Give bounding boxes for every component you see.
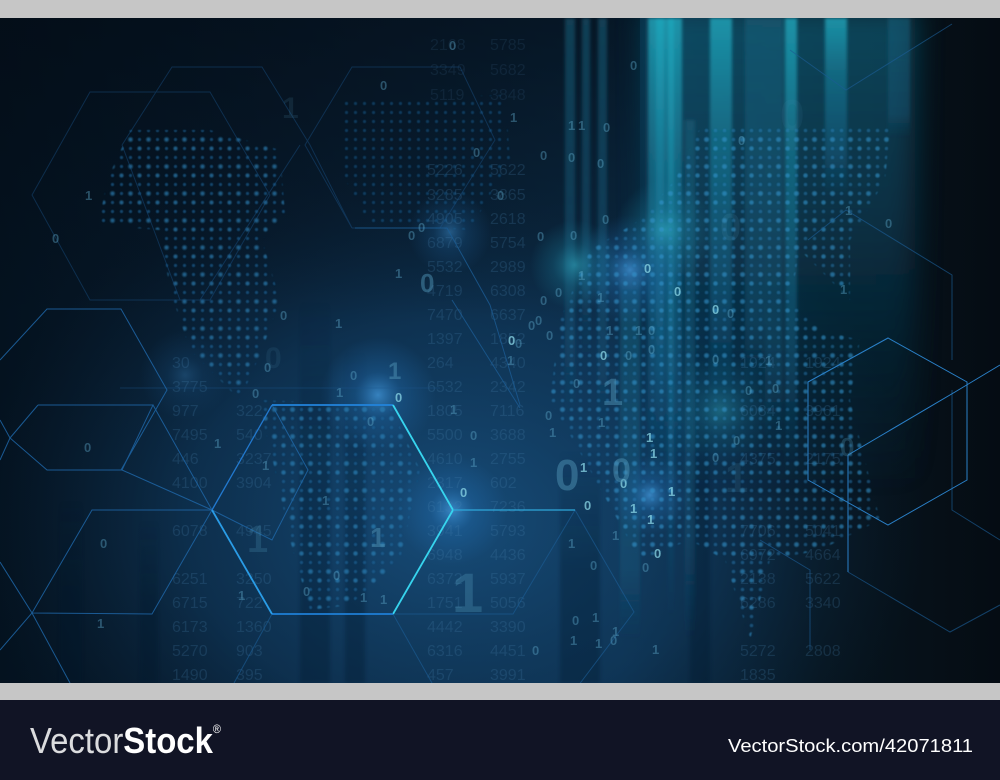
number columns: 5119 <box>430 87 465 104</box>
large binary digits: 1 <box>602 372 623 414</box>
glows <box>140 180 775 565</box>
binary digits: 0 <box>625 348 632 363</box>
binary digits: 1 <box>97 616 104 631</box>
large binary digits: 1 <box>388 358 401 385</box>
number columns: 4664 <box>805 547 841 564</box>
number columns: 457 <box>427 667 454 684</box>
binary digits: 0 <box>537 229 544 244</box>
number columns: 7470 <box>427 307 463 324</box>
number columns: 3340 <box>805 595 841 612</box>
number columns: 4375 <box>740 451 776 468</box>
binary digits: 1 <box>570 633 577 648</box>
number columns: 3250 <box>236 571 272 588</box>
number columns: 4451 <box>490 643 526 660</box>
number columns: 540 <box>236 427 263 444</box>
binary digits: 0 <box>303 584 310 599</box>
binary digits: 0 <box>449 38 456 53</box>
large binary digits <box>247 91 854 624</box>
number columns: 6948 <box>427 547 463 564</box>
binary digits: 1 <box>845 203 852 218</box>
number columns: 2618 <box>490 211 526 228</box>
number columns: 6251 <box>172 571 208 588</box>
large binary digits: 0 <box>265 342 282 375</box>
number columns: 6532 <box>427 379 463 396</box>
binary digits: 1 <box>595 636 602 651</box>
large binary digits: 0 <box>780 91 804 140</box>
number columns: 903 <box>236 643 263 660</box>
number columns: 5754 <box>490 235 526 252</box>
binary digits: 0 <box>84 440 91 455</box>
number columns: 5622 <box>805 571 841 588</box>
number columns: 5532 <box>427 259 463 276</box>
footer bar <box>0 700 1000 780</box>
binary digits: 1 <box>510 110 517 125</box>
number columns: 6316 <box>427 643 463 660</box>
number columns: 5622 <box>490 162 526 179</box>
number columns: 264 <box>427 355 454 372</box>
binary digits: 0 <box>545 408 552 423</box>
binary digits: 0 <box>252 386 259 401</box>
binary digits: 0 <box>745 383 752 398</box>
binary digits: 0 <box>727 306 734 321</box>
binary digits: 1 <box>775 418 782 433</box>
number columns: 4340 <box>490 355 526 372</box>
number columns: 322 <box>236 403 263 420</box>
number columns: 5270 <box>172 643 208 660</box>
number columns: 7706 <box>740 523 776 540</box>
binary digits: 1 <box>840 282 847 297</box>
large binary digits: 0 <box>420 268 434 298</box>
large binary digits: 0 <box>840 432 854 462</box>
number columns: 1360 <box>236 619 272 636</box>
number columns: 4719 <box>427 283 463 300</box>
number columns <box>172 37 841 684</box>
number columns: 6132 <box>427 499 463 516</box>
binary digits: 1 <box>606 323 613 338</box>
binary digits: 1 <box>360 590 367 605</box>
binary digits: 0 <box>572 613 579 628</box>
bright binary digits: 1 <box>630 501 637 516</box>
number columns: 6078 <box>172 523 208 540</box>
binary digits: 0 <box>570 228 577 243</box>
bright binary digits: 0 <box>460 485 467 500</box>
footer logo: ® <box>213 722 221 736</box>
number columns: 6715 <box>172 595 208 612</box>
binary digits: 1 <box>335 316 342 331</box>
binary digits: 0 <box>540 293 547 308</box>
binary digits: 0 <box>535 313 542 328</box>
number columns: 3285 <box>427 187 463 204</box>
number columns: 7495 <box>172 427 208 444</box>
bright binary digits: 1 <box>646 430 653 445</box>
large binary digits: 1 <box>725 454 748 501</box>
binary digits: 0 <box>738 133 745 148</box>
binary digits: 1 <box>507 353 514 368</box>
number columns: 5682 <box>490 62 526 79</box>
number columns: 1835 <box>740 667 776 684</box>
binary digits: 0 <box>264 360 271 375</box>
binary digits: 1 <box>380 592 387 607</box>
binary digits: 0 <box>380 78 387 93</box>
number columns: 446 <box>172 451 199 468</box>
binary digits: 0 <box>733 433 740 448</box>
number columns: 6084 <box>740 403 776 420</box>
dotted world map <box>90 90 895 665</box>
binary digits <box>52 38 892 658</box>
number columns: 6173 <box>172 619 208 636</box>
bright binary digits: 0 <box>620 476 627 491</box>
number columns: 1490 <box>172 667 208 684</box>
number columns: 3991 <box>490 667 526 684</box>
binary digits: 1 <box>470 455 477 470</box>
number columns: 3349 <box>430 62 466 79</box>
bright binary digits: 0 <box>654 546 661 561</box>
binary digits: 0 <box>603 120 610 135</box>
number columns: 722 <box>236 595 263 612</box>
bright central hexagon <box>212 405 575 614</box>
number columns: 6286 <box>740 595 776 612</box>
number columns: 602 <box>490 475 517 492</box>
binary digits: 1 <box>612 624 619 639</box>
number columns: 3237 <box>236 451 272 468</box>
binary digits: 1 <box>262 458 269 473</box>
number columns: 3865 <box>490 187 526 204</box>
binary digits: 0 <box>630 58 637 73</box>
bright binary digits: 0 <box>644 261 651 276</box>
binary digits: 1 <box>635 323 642 338</box>
number columns: 2168 <box>430 37 466 54</box>
large binary digits: 1 <box>247 519 268 561</box>
number columns: 395 <box>236 667 263 684</box>
number columns: 1852 <box>490 331 526 348</box>
bright binary digits <box>395 261 719 561</box>
binary digits: 1 <box>568 536 575 551</box>
binary digits: 0 <box>885 216 892 231</box>
number columns: 3904 <box>236 475 272 492</box>
number columns: 4945 <box>236 523 272 540</box>
bright binary digits: 0 <box>508 333 515 348</box>
left hexagons <box>0 309 308 683</box>
binary digits: 1 <box>214 436 221 451</box>
number columns: 5785 <box>490 37 526 54</box>
binary digits: 1 <box>85 188 92 203</box>
binary digits: 0 <box>532 643 539 658</box>
binary digits: 0 <box>515 336 522 351</box>
binary digits: 0 <box>100 536 107 551</box>
binary digits: 0 <box>573 376 580 391</box>
number columns: 4610 <box>427 451 463 468</box>
number columns: 2138 <box>740 571 776 588</box>
binary digits: 0 <box>333 568 340 583</box>
number columns: 5041 <box>805 523 841 540</box>
hexagon outlines <box>32 67 495 388</box>
binary digits: 0 <box>648 342 655 357</box>
number columns: 1751 <box>427 595 463 612</box>
number columns: 1805 <box>427 403 463 420</box>
number columns: 4905 <box>427 211 463 228</box>
binary digits: 1 <box>612 528 619 543</box>
number columns: 5272 <box>740 643 776 660</box>
binary digits: 0 <box>52 231 59 246</box>
center connecting lines <box>355 228 520 408</box>
binary digits: 0 <box>350 368 357 383</box>
bright binary digits: 1 <box>668 484 675 499</box>
number columns: 977 <box>172 403 199 420</box>
bright binary digits: 0 <box>600 348 607 363</box>
binary digits: 0 <box>546 328 553 343</box>
large binary digits: 0 <box>612 452 631 490</box>
binary digits: 0 <box>610 633 617 648</box>
bright binary digits: 1 <box>580 460 587 475</box>
binary digits: 0 <box>470 428 477 443</box>
binary digits: 0 <box>642 560 649 575</box>
binary digits: 1 <box>322 493 329 508</box>
large binary digits: 1 <box>452 561 483 624</box>
number columns: 3848 <box>490 87 526 104</box>
footer logo: VectorStock <box>30 720 221 761</box>
number columns: 5226 <box>427 162 463 179</box>
bright binary digits: 0 <box>395 390 402 405</box>
bright binary digits: 1 <box>647 512 654 527</box>
binary digits: 1 <box>765 353 772 368</box>
bright binary digits: 0 <box>584 498 591 513</box>
binary digits: 0 <box>602 212 609 227</box>
binary digits: 0 <box>367 414 374 429</box>
number columns: 4442 <box>427 619 463 636</box>
large binary digits: 1 <box>282 92 299 125</box>
binary digits: 0 <box>280 308 287 323</box>
binary digits: 0 <box>473 145 480 160</box>
number columns: 30 <box>172 355 190 372</box>
right bright hexagon <box>808 338 1000 572</box>
number columns: 7116 <box>490 403 525 420</box>
number columns: 5500 <box>427 427 463 444</box>
binary digits: 0 <box>540 148 547 163</box>
number columns: 2989 <box>490 259 526 276</box>
binary digits: 1 <box>450 402 457 417</box>
number columns: 2808 <box>805 643 841 660</box>
number columns: 6879 <box>427 235 463 252</box>
large binary digits: 0 <box>720 207 741 249</box>
binary digits: 0 <box>648 323 655 338</box>
binary digits: 1 <box>652 642 659 657</box>
number columns: 5056 <box>490 595 526 612</box>
large binary digits: 1 <box>370 522 386 553</box>
number columns: 1924 <box>740 355 776 372</box>
number columns: 7236 <box>490 499 526 516</box>
binary digits: 0 <box>712 352 719 367</box>
number columns: 4436 <box>490 547 526 564</box>
number columns: 1397 <box>427 331 463 348</box>
binary digits: 1 <box>395 266 402 281</box>
number columns: 2755 <box>490 451 526 468</box>
number columns: 3961 <box>805 403 841 420</box>
binary digits: 0 <box>590 558 597 573</box>
binary digits: 1 <box>549 425 556 440</box>
number columns: 3775 <box>172 379 208 396</box>
number columns: 6637 <box>490 307 526 324</box>
binary digits: 1 <box>336 385 343 400</box>
binary digits: 0 <box>568 150 575 165</box>
binary digits: 1 <box>597 290 604 305</box>
bottom grey band <box>0 683 1000 700</box>
binary digits: 0 <box>555 285 562 300</box>
footer image id: VectorStock.com/42071811 <box>728 736 973 756</box>
number columns: 3688 <box>490 427 526 444</box>
binary digits: 0 <box>418 220 425 235</box>
number columns: 1924 <box>805 355 841 372</box>
number columns: 2175 <box>805 451 841 468</box>
number columns: 3941 <box>427 523 463 540</box>
number columns: 4100 <box>172 475 208 492</box>
binary digits: 0 <box>497 188 504 203</box>
binary digits: 0 <box>772 381 779 396</box>
bright binary digits: 0 <box>712 302 719 317</box>
light streaks <box>565 8 915 640</box>
binary digits: 1 <box>578 118 585 133</box>
binary digits: 0 <box>597 156 604 171</box>
binary digits: 1 <box>598 415 605 430</box>
number columns: 2317 <box>427 475 463 492</box>
center and right faint hexagons <box>234 24 1000 690</box>
number columns: 6372 <box>427 571 463 588</box>
bright binary digits: 1 <box>650 446 657 461</box>
binary digits: 0 <box>408 228 415 243</box>
top grey band <box>0 0 1000 18</box>
binary digits: 1 <box>592 610 599 625</box>
large binary digits: 0 <box>555 451 579 500</box>
number columns: 6972 <box>740 547 776 564</box>
number columns: 6308 <box>490 283 526 300</box>
binary digits: 0 <box>528 318 535 333</box>
binary digits: 1 <box>238 588 245 603</box>
number columns: 5937 <box>490 571 526 588</box>
binary digits: 1 <box>578 268 585 283</box>
bright binary digits: 0 <box>674 284 681 299</box>
dark vertical bands <box>60 300 710 683</box>
number columns: 5793 <box>490 523 526 540</box>
binary digits: 1 <box>568 118 575 133</box>
number columns: 3390 <box>490 619 526 636</box>
number columns: 2342 <box>490 379 526 396</box>
binary digits: 0 <box>712 450 719 465</box>
